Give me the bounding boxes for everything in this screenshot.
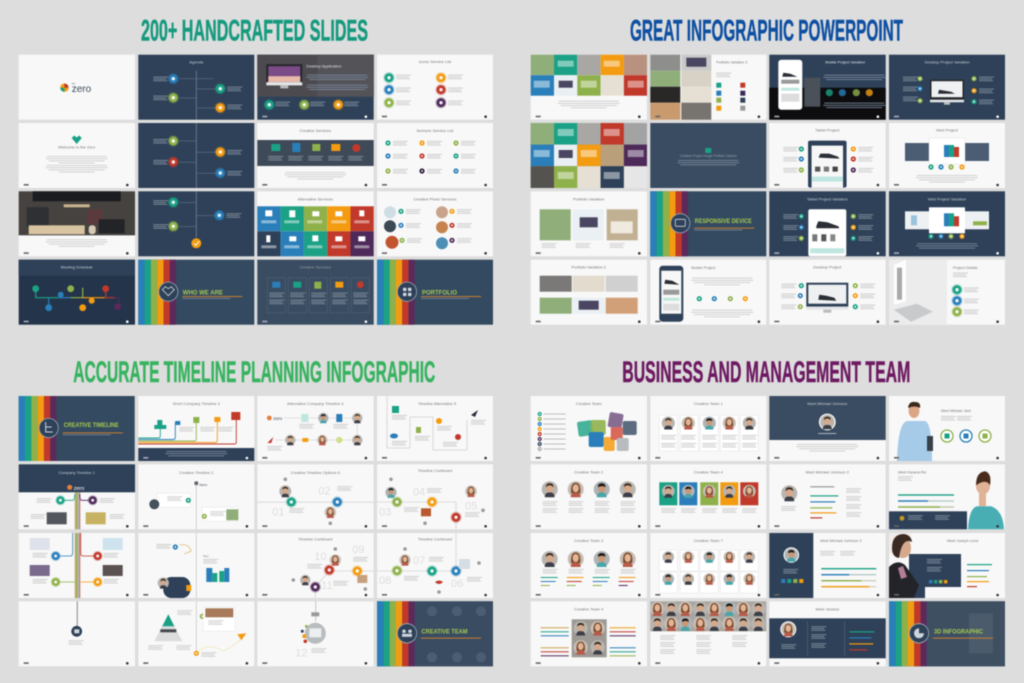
slide: creative team 2 xyxy=(531,464,647,529)
slide: agenda timeline end xyxy=(138,191,254,256)
slide: creative services columns: Creative Services xyxy=(300,265,331,270)
slide: who we are divider xyxy=(138,260,254,325)
slide: who we are divider: WHO WE ARE xyxy=(183,291,223,297)
slide: creative photo services xyxy=(377,191,493,256)
slide: mobile project: Mobile Project xyxy=(691,266,716,270)
slide: numeric service list: Numeric Service List xyxy=(417,128,454,133)
slide: meet michael johnson: Meet Michael Johnson xyxy=(807,401,847,406)
slide: portfolio variation xyxy=(531,191,647,256)
slide: alternative company timeline 4: zero xyxy=(273,416,283,421)
slide: creative timeline 2 end xyxy=(138,601,254,666)
slide: timeline continued 09 10 11: 11 xyxy=(321,580,333,592)
slide: creative team 4 photo xyxy=(531,601,647,666)
slide: creative team 4 cards: Creative Team 4 xyxy=(694,469,724,474)
slide: mobile project xyxy=(650,260,766,325)
slide: timeline continued 09 10 11: 10 xyxy=(314,551,327,563)
slide: desktop project variation: Desktop Project Variation xyxy=(925,60,969,65)
slide: creative team legend xyxy=(531,396,647,461)
slide: zero logo: zero xyxy=(72,84,92,95)
slide: company timeline 1 xyxy=(19,464,135,529)
slide: portfolio tiles two rows xyxy=(531,55,647,120)
slide: workspace photo xyxy=(19,191,135,256)
slide: meet mistrale jack: Meet Mistrale Jack xyxy=(941,409,971,413)
slide: zero logo xyxy=(19,55,135,120)
slide: meet mistrale jack xyxy=(889,396,1005,461)
slide: timeline continued 03 04 05: 03 xyxy=(379,506,391,518)
slide: creative team 4 photo: Creative Team 4 xyxy=(574,606,604,611)
slide: creative timeline options 6: 02 xyxy=(318,485,331,497)
slide: tablet project variation xyxy=(769,191,886,256)
panel: business and management team xyxy=(531,356,1005,666)
slide: welcome to the zero xyxy=(19,123,135,188)
slide: portfolio variation 2: Portfolio Variation 2 xyxy=(571,265,607,270)
slide: creative project image portfolio options xyxy=(650,123,766,188)
slide: tablet project: Tablet Project xyxy=(815,128,840,132)
slide: creative team 3 xyxy=(531,533,647,598)
slide: desktop project variation xyxy=(889,55,1005,120)
slide: creative team 2: Creative Team 2 xyxy=(574,469,604,474)
slide: 3d infographic divider xyxy=(889,601,1005,666)
heading: accurate timeline planning infographic: ACCURATE TIMELINE PLANNING INFOGRAPHIC xyxy=(73,356,435,389)
slide: timeline continued 12: 12 xyxy=(295,647,308,659)
slide: web project variation xyxy=(889,191,1005,256)
slide: short company timeline 3: Short Company Timeline 3 xyxy=(173,401,221,406)
slide: meeting schedule xyxy=(19,260,135,325)
slide: meet michael johnson xyxy=(769,396,886,461)
slide: timeline alternative 5: Timeline Alternative 5 xyxy=(418,401,457,406)
slide: mobile project variation xyxy=(769,55,886,120)
slide: desktop project: Desktop Project xyxy=(813,265,842,270)
slide: web project variation: Web Project Variation xyxy=(928,196,966,201)
slide: company timeline 1 end xyxy=(19,601,135,666)
slide: portfolio variation 2 xyxy=(531,260,647,325)
slide: creative team legend: Creative Team xyxy=(576,401,602,406)
slide: alternative services tiles: Alternative Services xyxy=(298,196,333,201)
slide: numeric service list xyxy=(377,123,493,188)
slide: agenda timeline: Agenda xyxy=(189,60,204,65)
slide: 3d infographic divider: 3D INFOGRAPHIC xyxy=(934,629,984,635)
slide: company timeline 1: Company Timeline 1 xyxy=(58,470,96,475)
slide: creative services columns xyxy=(257,260,374,325)
slide: timeline continued 06 07 08: 08 xyxy=(379,575,391,587)
slide: agenda timeline continued xyxy=(138,123,254,188)
slide: creative services band xyxy=(257,123,374,188)
slide: portfolio tiles three rows xyxy=(531,123,647,188)
slide: creative timeline 2 continued xyxy=(138,533,254,598)
slide: creative timeline 2: Creative Timeline 2 xyxy=(179,470,214,475)
slide: web project xyxy=(889,123,1005,188)
panel: great infographic powerpoint xyxy=(531,14,1005,325)
slide: meet michael johnson 3 xyxy=(769,533,886,598)
slide: timeline continued 03 04 05 xyxy=(377,464,493,529)
slide: timeline continued 03 04 05: 04 xyxy=(413,486,425,498)
slide: creative timeline divider: CREATIVE TIMELINE xyxy=(64,423,119,429)
slide: creative team 7 xyxy=(650,533,766,598)
slide: meet michael johnson 2: Meet Michael Johnson 2 xyxy=(806,469,850,474)
slide: meet joseph lend xyxy=(889,533,1005,598)
slide: creative team 7: Creative Team 7 xyxy=(694,538,724,543)
slide: creative team 1 xyxy=(650,396,766,461)
heading: 200+ handcrafted slides: 200+ HANDCRAFTED SLIDES xyxy=(141,14,368,48)
slide: timeline continued 12 xyxy=(257,601,374,666)
slide: meet jessica xyxy=(769,601,886,666)
slide: tablet project variation: Tablet Project Variation xyxy=(807,196,848,201)
slide: welcome to the zero: Welcome to the Zero xyxy=(58,144,96,150)
slide: creative timeline options 6: 01 xyxy=(272,506,285,518)
slide: timeline continued 03 04 05: 05 xyxy=(465,500,477,512)
slide: desktop application xyxy=(257,55,374,120)
slide: zero logo: the xyxy=(72,81,76,85)
slide: creative photo services: Creative Photo Services xyxy=(414,196,456,201)
slide: short company timeline 3 xyxy=(138,396,254,461)
slide: web project: Web Project xyxy=(936,128,959,132)
slide: portfolio variation 3 xyxy=(650,55,766,120)
slide: desktop application: Desktop Application xyxy=(306,64,341,69)
slide: creative timeline 2 continued: Bars xyxy=(203,554,209,558)
slide: team photo wall with lists xyxy=(650,601,766,666)
slide: creative timeline options 6 xyxy=(257,464,374,529)
slide: alternative company timeline 4 xyxy=(257,396,374,461)
slide: project details: Project Details xyxy=(953,266,978,270)
slide: meet karana riz xyxy=(889,464,1005,529)
slide: meet karana riz: Meet Karana Riz xyxy=(898,470,926,474)
slide: portfolio divider xyxy=(377,260,493,325)
slide: tablet project xyxy=(769,123,886,188)
slide: creative team 4 cards xyxy=(650,464,766,529)
slide: iconic service list: Iconic Service List xyxy=(419,59,452,64)
slide: creative team 3: Creative Team 3 xyxy=(574,538,604,543)
slide: creative timeline options 6: Creative Timeline Options 6 xyxy=(291,470,341,475)
slide: creative timeline 2: zero xyxy=(199,482,208,487)
slide: creative timeline divider xyxy=(19,396,135,461)
slide: timeline continued 06 07 08: 06 xyxy=(451,578,463,590)
slide: meet michael johnson 3: Meet Michael Johnson 3 xyxy=(820,539,861,543)
slide: creative team divider xyxy=(377,601,493,666)
slide: timeline continued 03 04 05: Timeline Continued xyxy=(418,468,452,473)
slide: portfolio variation: Portfolio Variation xyxy=(573,196,604,201)
slide: alternative company timeline 4: Alternative Company Timeline 4 xyxy=(287,401,344,406)
slide: project details xyxy=(889,260,1005,325)
slide: timeline alternative 5 xyxy=(377,396,493,461)
panel: accurate timeline planning infographic xyxy=(19,356,493,666)
slide: portfolio divider: PORTFOLIO xyxy=(422,291,457,297)
slide: portfolio variation 3: Portfolio Variation 3 xyxy=(716,61,747,65)
slide: creative project image portfolio options: Creative Project Image Portfolio Options xyxy=(680,154,737,158)
slide: timeline continued 09 10 11: 09 xyxy=(352,544,365,556)
slide: timeline continued 09 10 11: Timeline Continued xyxy=(298,536,332,542)
slide: creative timeline 2 xyxy=(138,464,254,529)
slide: creative services band: Creative Services xyxy=(300,128,331,133)
slide: timeline continued 06 07 08: Timeline Continued xyxy=(418,536,452,542)
slide: timeline continued 06 07 08 xyxy=(377,533,493,598)
panel: 200+ handcrafted slides xyxy=(19,14,493,325)
slide: company timeline 1: zero xyxy=(74,486,84,492)
slide: meet joseph lend: Meet Joseph Lend xyxy=(947,539,978,543)
slide: timeline continued 06 07 08: 07 xyxy=(413,555,425,567)
slide: company timeline 1 continued xyxy=(19,533,135,598)
slide: agenda timeline xyxy=(138,55,254,120)
slide: responsive device divider: RESPONSIVE DEVICE xyxy=(695,219,752,225)
slide: meeting schedule: Meeting Schedule xyxy=(61,265,93,270)
slide: meet jessica: Meet Jessica xyxy=(816,606,840,611)
slide: creative team divider: CREATIVE TEAM xyxy=(422,629,468,635)
slide: mobile project variation: Mobile Project Variation xyxy=(825,61,865,65)
slide: desktop project xyxy=(769,260,886,325)
slide: iconic service list xyxy=(377,55,493,120)
slide: responsive device divider xyxy=(650,191,766,256)
slide: alternative services tiles xyxy=(257,191,374,256)
slide: creative team 1: Creative Team 1 xyxy=(694,401,724,406)
slide: meet michael johnson 2 xyxy=(769,464,886,529)
slide: timeline continued 09 10 11 xyxy=(257,533,374,598)
